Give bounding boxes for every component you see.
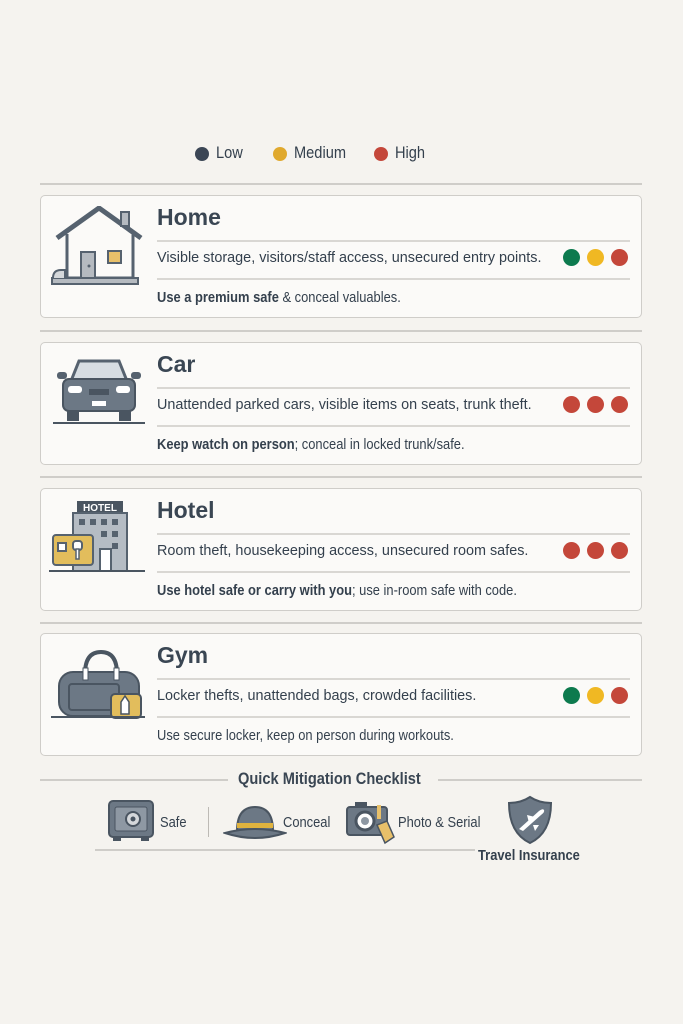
risk dots (563, 396, 628, 413)
icon: car (53, 360, 145, 424)
panel: car: Car (157, 351, 195, 377)
panel: car: Keep watch on person; conceal in locked trunk/safe. (157, 436, 465, 453)
icon: gym bag (51, 650, 145, 719)
panel: home: Use a premium safe & conceal valuables. (157, 289, 401, 306)
icon: safe (108, 800, 154, 841)
icon: house (51, 206, 142, 285)
icon: hat (223, 806, 287, 839)
legend: High (395, 143, 425, 162)
checklist heading: Quick Mitigation Checklist (238, 769, 421, 788)
panel: hotel: Hotel (157, 497, 214, 523)
icon: hotel (49, 501, 145, 572)
risk dots (563, 249, 628, 266)
icon: hotel: HOTEL (83, 503, 117, 514)
legend (195, 143, 425, 162)
icon: camera (346, 802, 395, 844)
risk dots (563, 542, 628, 559)
checklist items: Conceal (283, 814, 330, 831)
legend: Medium (294, 143, 346, 162)
icon: shield (508, 796, 552, 844)
checklist items: Travel Insurance (478, 847, 580, 864)
panel: home: Home (157, 204, 221, 230)
legend: Low (216, 143, 243, 162)
checklist items: Safe (160, 814, 187, 831)
panel: hotel: Use hotel safe or carry with you; use in-room safe with code. (157, 582, 517, 599)
panel: car: Unattended parked cars, visible items on seats, trunk theft. (157, 396, 532, 413)
panel: gym: Locker thefts, unattended bags, crowded facilities. (157, 687, 476, 704)
risk dots (563, 687, 628, 704)
panel: hotel (40, 488, 642, 611)
panel: hotel: Room theft, housekeeping access, unsecured room safes. (157, 542, 528, 559)
panel: home (40, 195, 642, 318)
checklist items (95, 796, 580, 864)
panel: home: Visible storage, visitors/staff access, unsecured entry points. (157, 249, 541, 266)
panel: car (40, 342, 642, 465)
checklist items: Photo & Serial (398, 814, 480, 831)
panel: gym: Gym (157, 642, 208, 668)
panel: gym: Use secure locker, keep on person during workouts. (157, 727, 454, 744)
panel: gym (40, 633, 642, 756)
